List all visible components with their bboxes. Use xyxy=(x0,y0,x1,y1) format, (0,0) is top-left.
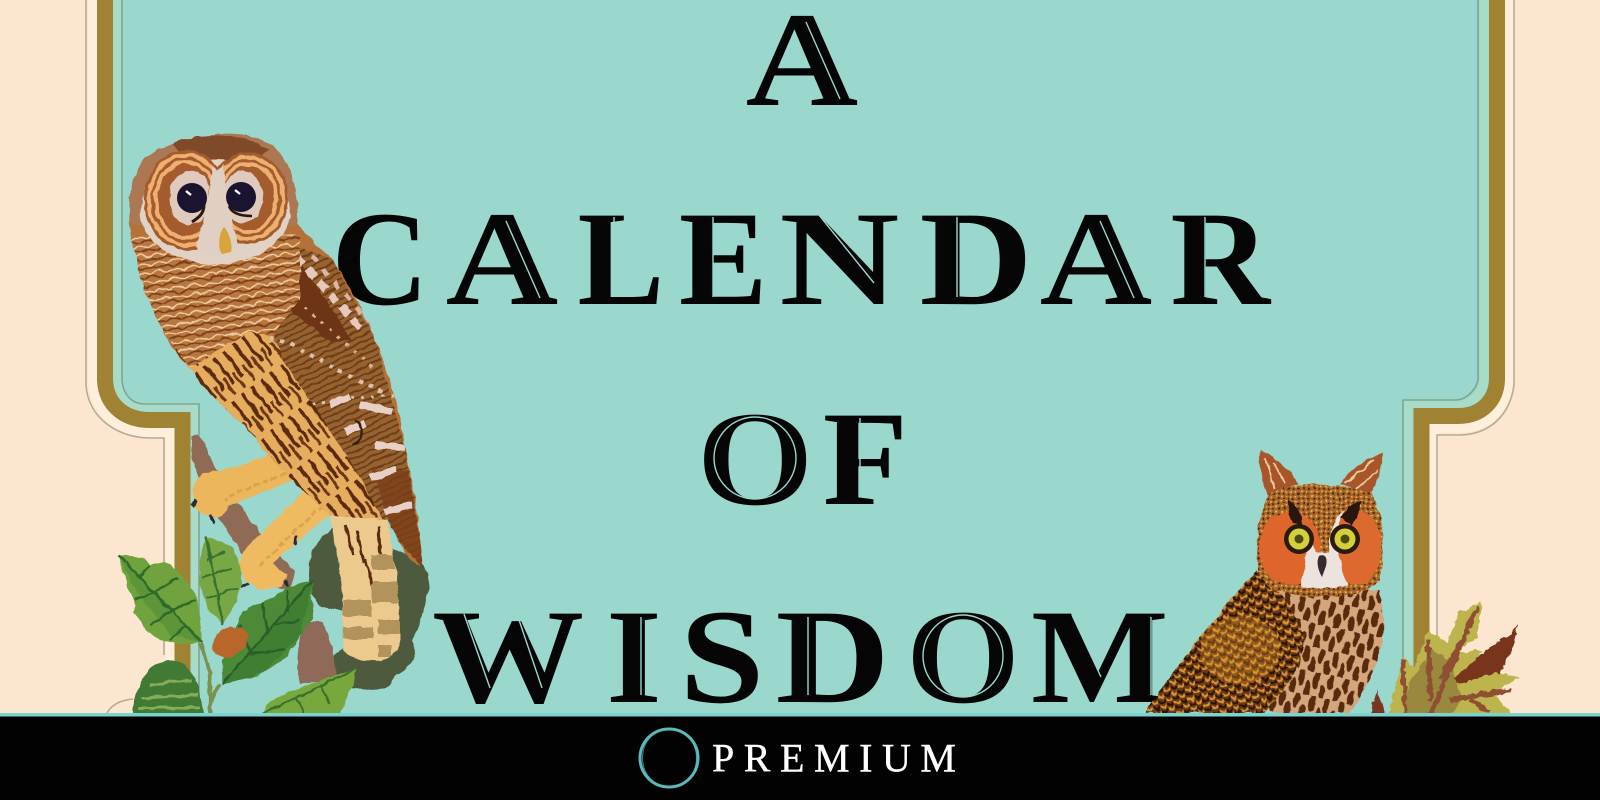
dark brown leaf xyxy=(1453,625,1518,683)
owl body xyxy=(120,125,430,575)
title word: WISDOM: D xyxy=(776,582,890,731)
title word: WISDOM xyxy=(432,581,1169,732)
talons xyxy=(192,500,297,588)
leaf 1 xyxy=(118,555,202,644)
yellow leaf mass xyxy=(1388,603,1520,716)
title word: WISDOM: I xyxy=(606,583,662,732)
left facial disc rings xyxy=(144,150,218,251)
left illustration: barred owl on branch with leaves xyxy=(118,125,430,716)
left face disc xyxy=(1259,511,1321,585)
belly with dark streaks xyxy=(175,326,392,520)
centre of face xyxy=(196,164,238,256)
right face disc xyxy=(1330,511,1382,585)
rufous wing tip xyxy=(372,470,424,570)
head xyxy=(125,130,300,225)
teal plaque xyxy=(105,0,1497,716)
title letter inlines xyxy=(464,22,1205,697)
pale inner band on the plaque xyxy=(118,0,1484,716)
beak xyxy=(1318,555,1327,577)
wing bars and spots xyxy=(270,256,412,512)
gold frame xyxy=(86,0,1514,716)
right autumn leaves xyxy=(1370,603,1520,716)
ear streaks xyxy=(1265,458,1378,490)
left brow xyxy=(1288,500,1304,526)
nut xyxy=(207,620,253,664)
right eye xyxy=(1330,524,1360,554)
banner background xyxy=(0,716,1600,800)
right eye xyxy=(226,182,256,216)
small brown leaf xyxy=(1370,690,1385,716)
leaf 2 xyxy=(199,537,242,625)
barred neck xyxy=(128,235,300,368)
leaf stem xyxy=(200,643,220,716)
title word: WISDOM: S xyxy=(680,583,764,732)
title word: CALENDAR xyxy=(332,183,1271,334)
dark foliage behind tail xyxy=(309,526,429,690)
leg shading xyxy=(225,474,330,568)
left eye xyxy=(1284,524,1314,554)
brown veins xyxy=(1403,606,1510,716)
banner teal rule xyxy=(0,713,1600,716)
title word: CALENDAR: A xyxy=(1040,184,1152,334)
right brow xyxy=(1340,502,1362,525)
right facial disc rings xyxy=(208,152,288,244)
bottom banner xyxy=(0,713,1600,800)
wing xyxy=(1143,570,1304,716)
title word: CALENDAR: L xyxy=(578,184,664,334)
title word: CALENDAR: R xyxy=(1170,183,1271,334)
wing xyxy=(270,246,424,570)
title word: OF: O xyxy=(697,384,813,533)
title word: CALENDAR: E xyxy=(679,184,767,333)
leaf 3 xyxy=(222,580,314,684)
lower leg and foot xyxy=(240,478,340,589)
title word: WISDOM: W xyxy=(432,583,584,732)
title word: CALENDAR: D xyxy=(920,184,1033,334)
chest xyxy=(1270,590,1390,718)
title word: WISDOM: M xyxy=(1031,583,1169,732)
premium ring icon xyxy=(640,728,698,788)
upper branch xyxy=(191,435,295,590)
wing golden highlight xyxy=(1200,616,1280,684)
right ear xyxy=(1340,453,1383,494)
lower branch xyxy=(298,622,336,684)
head crown xyxy=(172,135,270,160)
right illustration: long-eared owl xyxy=(1143,449,1390,718)
left eye xyxy=(177,183,207,222)
owl body xyxy=(1143,570,1390,718)
olive shading xyxy=(1400,650,1462,716)
title word: OF: F xyxy=(823,384,908,534)
title word: CALENDAR: N xyxy=(779,184,899,333)
premium label: PREMIUM xyxy=(712,736,956,780)
leaf 4 xyxy=(132,660,204,716)
upper leg and foot xyxy=(192,450,292,518)
pale band outside the frame xyxy=(105,0,1497,716)
title word: WISDOM: O xyxy=(906,581,1020,732)
face rim xyxy=(140,160,290,264)
left ear xyxy=(1260,449,1299,495)
title: A Calendar of Wisdom xyxy=(332,0,1271,732)
white face centre xyxy=(1292,508,1348,589)
dark shoulder xyxy=(290,264,352,342)
title word: CALENDAR: A xyxy=(446,184,558,334)
owl tail xyxy=(330,515,400,662)
owl, branch and legs xyxy=(120,125,430,690)
beak xyxy=(219,227,232,254)
leaves and nut xyxy=(118,537,358,716)
title word: CALENDAR: C xyxy=(332,185,429,334)
head xyxy=(1257,485,1384,596)
title word: OF xyxy=(697,384,908,534)
leaf 5 xyxy=(260,668,358,716)
owl body, ears and head xyxy=(1143,449,1390,718)
